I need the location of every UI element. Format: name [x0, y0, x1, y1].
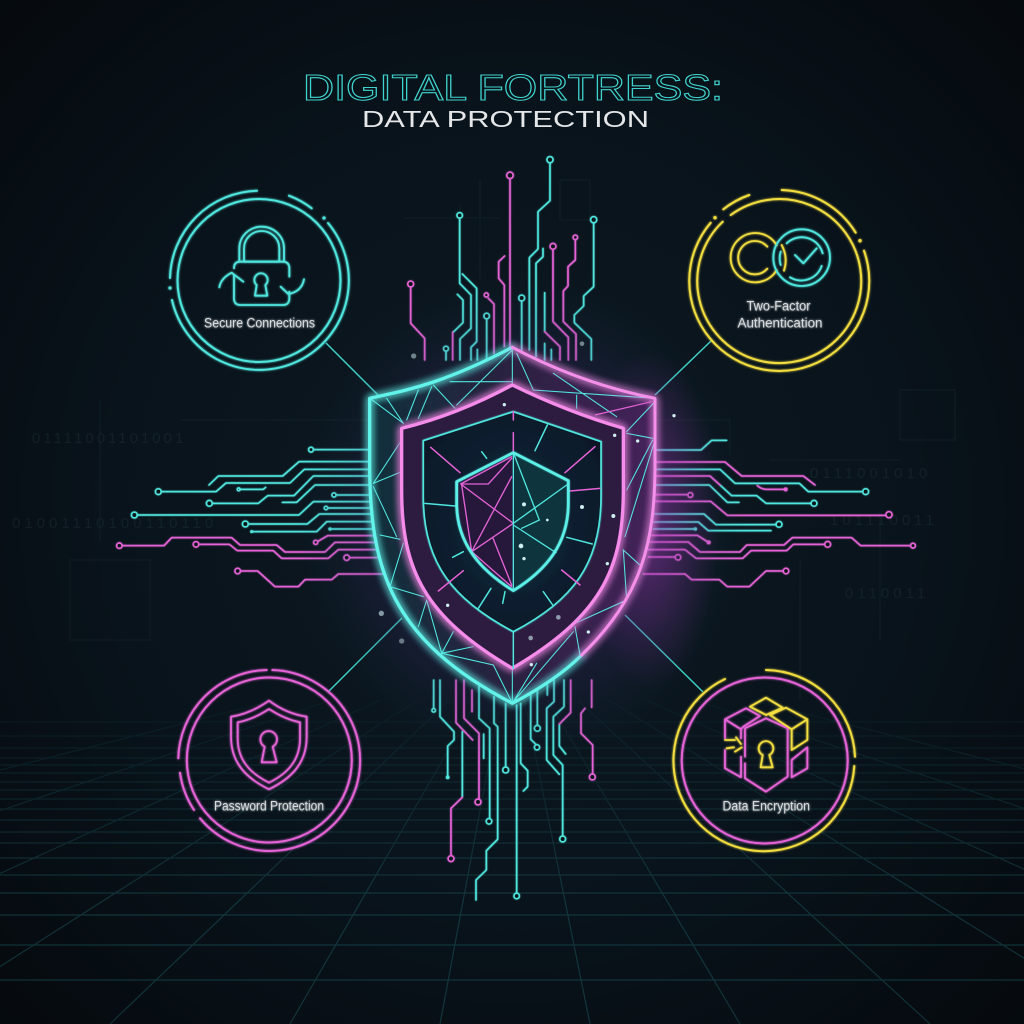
- icon: encrypted cube with keyhole: [725, 698, 807, 792]
- outer arcs: [168, 191, 349, 370]
- icon: linked rings with check: [731, 229, 830, 286]
- heading: Digital Fortress: DIGITAL FORTRESS:: [303, 67, 723, 108]
- panel: two-factor authentication: [689, 190, 869, 371]
- rings: [178, 670, 360, 851]
- core shield star lines: [461, 453, 567, 591]
- shield right halo: [580, 350, 720, 690]
- outer shield outline: [370, 347, 582, 703]
- label: Data Encryption: [722, 798, 810, 814]
- panel: password protection: [178, 670, 360, 851]
- panel: secure connections: [168, 191, 349, 370]
- inner teal shield outline: [423, 412, 601, 632]
- outer facets: [370, 347, 655, 703]
- faint background circuitry and binary: 101110011: [830, 512, 938, 529]
- circuit traces: left: [117, 447, 383, 587]
- core shield right half: [513, 453, 568, 591]
- middle pink shield: [402, 385, 623, 668]
- label: Two-Factor: [746, 298, 811, 314]
- facet accent: [595, 402, 652, 415]
- core shield left half: [457, 453, 513, 591]
- ring: [178, 199, 340, 362]
- rings: [689, 190, 869, 371]
- circuit traces: bottom: [432, 680, 595, 900]
- faint background circuitry and binary: 0110011: [845, 585, 929, 602]
- label: Password Protection: [214, 798, 324, 814]
- circuit traces: right: [643, 440, 915, 587]
- icon: padlock with arrows: [219, 227, 304, 305]
- radial dashes: [425, 412, 600, 668]
- perspective floor grid: [0, 713, 1024, 1024]
- faint background circuitry and binary: [12, 180, 955, 700]
- outer shield fill: [370, 347, 655, 703]
- rings: [682, 678, 848, 844]
- faint background circuitry and binary: 0111001010: [810, 465, 931, 482]
- panel: two-factor authentication: Authentication: [738, 316, 822, 330]
- title: [303, 67, 723, 132]
- faint background circuitry and binary: 01001110100110110: [12, 515, 217, 532]
- faint background circuitry and binary: 01111001101001: [32, 430, 186, 447]
- subheading: Data Protection: DATA PROTECTION: [362, 106, 649, 132]
- outer shield pink right edge: [512, 347, 655, 655]
- icon: shield with keyhole: [231, 701, 307, 789]
- core shield outline: [457, 453, 568, 591]
- panel: data encryption: [673, 670, 855, 851]
- connector lines from feature circles to shield: [326, 341, 711, 692]
- circuit traces: top: [408, 157, 597, 360]
- central shield: [295, 275, 745, 765]
- label: Secure Connections: [204, 316, 315, 330]
- data particles: [379, 341, 676, 666]
- shield halo: [295, 275, 745, 765]
